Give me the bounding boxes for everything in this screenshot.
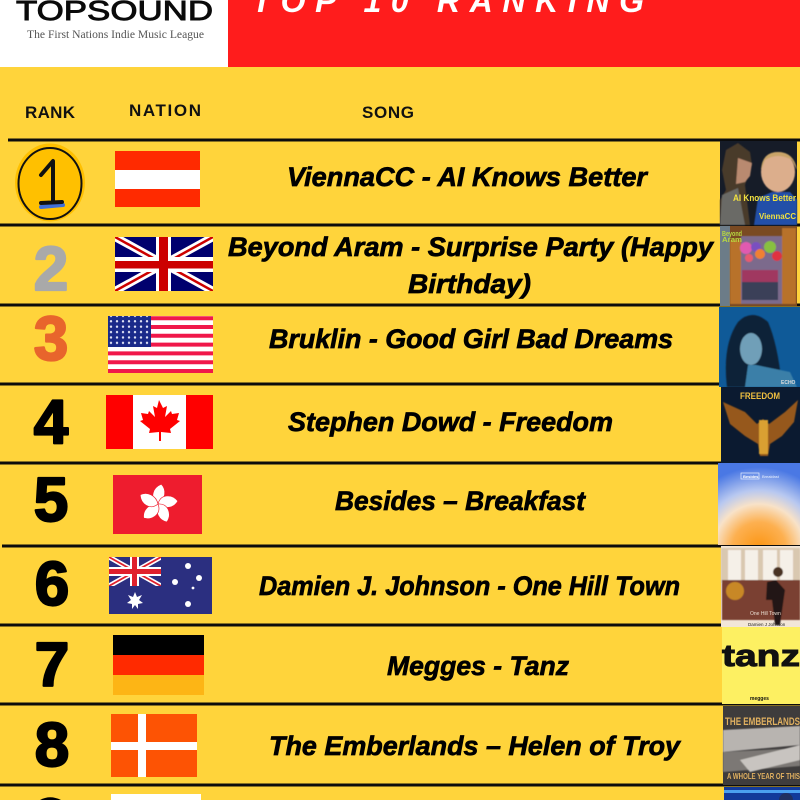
cover 3: Good Girl Bad Dreams: ECHO [781, 380, 796, 386]
flag: Australia [109, 557, 212, 614]
cover 7: tanz [722, 627, 800, 704]
cover 6: One Hill Town: Damien J Johnson [748, 622, 786, 627]
flag: United States [108, 316, 213, 373]
rank 8 number: 8 [35, 711, 69, 780]
nation heading: NATION [129, 101, 202, 120]
cover 7: tanz: megges [750, 696, 769, 702]
song heading: SONG [362, 103, 415, 122]
column headings [25, 101, 415, 122]
song 2 [228, 232, 715, 299]
song 3: Bruklin - Good Girl Bad Dreams [269, 324, 673, 354]
cover 3: Good Girl Bad Dreams [719, 307, 800, 387]
song 4: Stephen Dowd - Freedom [288, 407, 613, 437]
rank 2 number: 2 [34, 235, 68, 304]
song 5: Besides – Breakfast [335, 486, 586, 516]
cover 2: Surprise Party: Beyond [722, 231, 742, 238]
header: logo panel [0, 0, 228, 67]
cover 4: Freedom [721, 387, 800, 463]
cover 6: One Hill Town: One Hill Town [750, 611, 781, 617]
rank 9 number, top edge only visible [40, 797, 61, 800]
flag: rank 9 partial [111, 794, 201, 800]
cover 5: Breakfast: Besides [743, 474, 759, 479]
flag: Canada [106, 395, 213, 449]
cover 8: The Emberlands [723, 706, 800, 785]
rank heading: RANK [25, 103, 76, 122]
rank 6 number: 6 [35, 550, 69, 619]
cover 7: tanz: tanz [722, 638, 800, 673]
cover 5: Breakfast: Breakfast [762, 474, 780, 479]
cover 4: Freedom: FREEDOM [740, 391, 780, 401]
song 6: Damien J. Johnson - One Hill Town [259, 571, 680, 601]
song 2: Birthday) [408, 269, 531, 299]
cover 2: Surprise Party [720, 226, 797, 306]
cover 1: AI Knows Better: ViennaCC [759, 211, 796, 221]
song 7: Megges - Tanz [387, 651, 569, 681]
header: title banner [228, 0, 800, 67]
rank 1 badge [15, 144, 85, 222]
flag: Hong Kong [113, 475, 202, 534]
flag: United Kingdom [115, 237, 213, 291]
song 8: The Emberlands – Helen of Troy [269, 731, 682, 761]
logo tagline: The First Nations Indie Music League [27, 27, 204, 41]
flag: Austria [115, 151, 200, 207]
rank 3 number: 3 [34, 305, 68, 374]
flag: Denmark [111, 714, 197, 777]
cover 6: One Hill Town [721, 546, 800, 627]
rank 5 number: 5 [34, 466, 68, 535]
song 2: Beyond Aram - Surprise Party (Happy [228, 232, 715, 262]
cover 9: partial [724, 787, 800, 800]
cover 5: Breakfast [718, 463, 800, 545]
cover 2: Surprise Party: Aram [722, 237, 742, 244]
rank 4 number: 4 [34, 388, 69, 457]
song 1: ViennaCC - AI Knows Better [287, 162, 648, 192]
flag: Germany [113, 635, 204, 695]
cover 1: AI Knows Better [720, 141, 797, 225]
rank 7 number: 7 [35, 631, 69, 700]
